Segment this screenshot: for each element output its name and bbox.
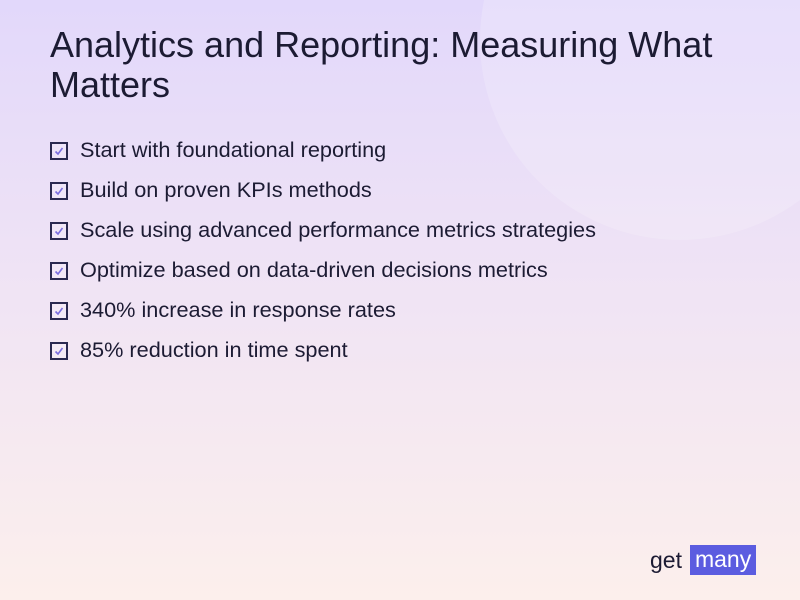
logo [650, 545, 756, 575]
checklist [50, 137, 596, 362]
item 3: Scale using advanced performance metrics strategies [80, 217, 596, 242]
item 1: Start with foundational reporting [80, 137, 386, 162]
title: Analytics and Reporting: Measuring What Matters [50, 24, 712, 105]
item 5: 340% increase in response rates [80, 297, 396, 322]
item 2: Build on proven KPIs methods [80, 177, 372, 202]
item 6: 85% reduction in time spent [80, 337, 348, 362]
logo: many [695, 546, 751, 572]
item 4: Optimize based on data-driven decisions metrics [80, 257, 548, 282]
logo: get [650, 546, 682, 572]
